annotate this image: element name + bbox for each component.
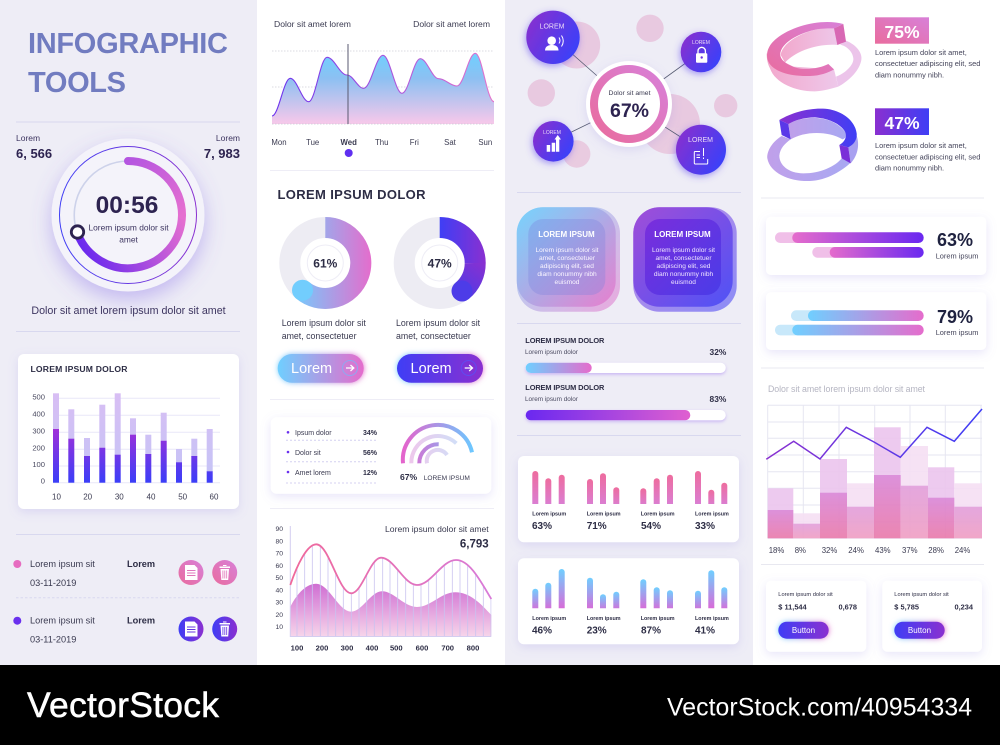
card: pink mini bars: 71% — [587, 521, 607, 532]
progress 32 percent — [525, 336, 727, 373]
panel: column 3 nodes and bars — [505, 0, 753, 665]
footer banner: VectorStock.com/40954334 — [667, 694, 972, 722]
text block 75 percent: consectetuer adipiscing elit, sed — [875, 59, 980, 68]
donut 47 percent — [404, 228, 475, 302]
stat right: Lorem — [216, 133, 240, 143]
donut captions: amet, consectetuer — [282, 331, 357, 341]
list row 2: 03-11-2019 — [30, 634, 76, 644]
panel: column 1 timer and bar chart — [0, 0, 257, 665]
card: blue mini bars: 23% — [587, 626, 607, 636]
3D ring violet — [767, 109, 858, 181]
card: stacked bar chart: 40 — [147, 492, 156, 502]
card: stacked bar chart: 200 — [32, 444, 45, 452]
list row 1 — [13, 559, 237, 588]
chart: double line with spikes: 600 — [416, 644, 428, 652]
badge 47 percent — [875, 108, 929, 135]
card: blue mini bars: Lorem ipsum — [641, 616, 675, 622]
card: blue mini bars: 46% — [532, 626, 552, 636]
chart: double line with spikes: 90 — [275, 526, 283, 533]
card: list and arcs: 67% — [400, 472, 418, 482]
stacked bar and line chart: 37% — [902, 546, 918, 555]
card: list and arcs: Dolor sit — [295, 450, 321, 457]
card: price left: $ 11,544 — [778, 602, 808, 612]
progress 32 percent: 32% — [710, 347, 727, 357]
chart: double line with spikes: 800 — [467, 644, 479, 652]
chart: concentric arcs — [403, 425, 472, 463]
rounded tile: light gradient: Lorem ipsum dolor sit — [535, 247, 599, 254]
chart: double line with spikes: 50 — [275, 575, 283, 582]
weekly area chart — [271, 44, 494, 157]
node: growth bars — [533, 121, 574, 162]
badge 47 percent: 47% — [884, 113, 920, 133]
weekly area chart: Sat — [444, 138, 457, 147]
rounded tile: light gradient — [517, 207, 620, 312]
button: violet Lorem — [397, 354, 483, 383]
card: price right: $ 5,785 — [894, 602, 919, 612]
weekly area chart: Tue — [306, 138, 319, 147]
card: blue mini bars: 87% — [641, 626, 661, 636]
donut 61 percent — [290, 227, 361, 301]
donut captions: amet, consectetuer — [396, 331, 471, 341]
card: bars 79 percent: 79% — [937, 307, 973, 327]
node: document — [676, 125, 726, 175]
card: list and arcs: 12% — [363, 470, 378, 477]
chart: double line with spikes: 200 — [316, 644, 328, 652]
card: stacked bar chart: 0 — [41, 476, 45, 486]
card: bars 79 percent — [766, 292, 986, 350]
rounded tile: light gradient: LOREM IPSUM — [538, 230, 595, 239]
weekly area chart: Mon — [271, 138, 287, 147]
card: stacked bar chart: 30 — [115, 492, 124, 502]
rounded tile: violet gradient: euismod — [671, 279, 696, 286]
footer banner: VectorStock — [27, 685, 219, 725]
progress 83 percent — [525, 383, 727, 420]
title: INFOGRAPHIC — [28, 28, 228, 60]
weekly area chart: Sun — [478, 138, 492, 147]
timer dial: amet — [119, 234, 138, 244]
chart: double line with spikes: 30 — [275, 600, 283, 607]
text block 47 percent: Lorem ipsum dolor sit amet, — [875, 141, 967, 150]
chart: double line with spikes: 700 — [441, 644, 454, 652]
rounded tile: violet gradient: amet, consectetuer — [655, 255, 712, 262]
rounded tile: light gradient: adipiscing elit, sed — [540, 263, 594, 270]
chart: double line with spikes: 300 — [341, 644, 353, 652]
card: stacked bar chart: 50 — [178, 492, 188, 502]
stacked bar and line chart: 18% — [769, 546, 784, 555]
card: blue mini bars: 41% — [695, 626, 715, 636]
card: price right: Button — [908, 626, 931, 635]
rounded tile: light gradient: diam nonummy nibh — [537, 271, 597, 278]
donut 47 percent: 47% — [428, 256, 452, 270]
footer banner — [0, 665, 1000, 745]
badge 75 percent: 75% — [884, 22, 920, 42]
progress 83 percent: LOREM IPSUM DOLOR — [525, 383, 605, 392]
stacked bar and line chart: 43% — [875, 546, 891, 555]
chart: double line with spikes: 6,793 — [460, 538, 489, 550]
icon: trash — [220, 565, 230, 580]
text block 75 percent: diam nonummy nibh. — [875, 70, 944, 80]
list row 1: Lorem ipsum sit — [30, 559, 95, 569]
section heading: LOREM IPSUM DOLOR — [278, 187, 426, 202]
rounded tile: violet gradient: Lorem ipsum dolor sit — [652, 247, 715, 254]
center gauge 67 percent: Dolor sit amet — [609, 90, 651, 97]
card: price left: Lorem ipsum dolor sit — [778, 592, 833, 598]
card: stacked bar chart: 500 — [32, 392, 45, 402]
panel: column 2 charts and donuts — [268, 21, 494, 650]
card: pink mini bars: Lorem ipsum — [641, 512, 675, 518]
area chart header: Dolor sit amet lorem — [274, 19, 351, 29]
card: price left — [766, 581, 866, 652]
node: document: LOREM — [688, 137, 713, 144]
badge 75 percent — [875, 17, 929, 44]
card: stacked bar chart: 10 — [52, 492, 61, 502]
button: violet Lorem: Lorem — [410, 361, 452, 377]
list row 2: Lorem — [127, 616, 155, 626]
rounded tile: violet gradient: LOREM IPSUM — [654, 230, 711, 239]
card: pink mini bars: 33% — [695, 521, 715, 532]
card: blue mini bars: Lorem ipsum — [695, 616, 729, 622]
chart: double line with spikes: 500 — [390, 644, 403, 652]
button: gradient Lorem: Lorem — [291, 361, 332, 377]
card: list and arcs: 56% — [363, 450, 378, 457]
stacked bar and line chart: 24% — [848, 546, 864, 555]
icon: trash — [220, 622, 230, 636]
list row 2 — [13, 616, 237, 644]
card: price right: Lorem ipsum dolor sit — [894, 592, 949, 598]
card: blue mini bars: Lorem ipsum — [532, 616, 566, 622]
card: bars 79 percent: Lorem ipsum — [936, 328, 978, 337]
rounded tile: violet gradient: diam nonummy nibh — [654, 271, 714, 278]
stacked bar and line chart: 24% — [955, 546, 970, 555]
stat right: 7, 983 — [204, 146, 240, 161]
card: stacked bar chart: 100 — [32, 460, 45, 469]
card: pink mini bars: Lorem ipsum — [532, 512, 566, 518]
area chart header: Dolor sit amet lorem — [413, 19, 490, 29]
card: stacked bar chart: LOREM IPSUM DOLOR — [30, 364, 128, 374]
chart: double line with spikes: 20 — [275, 612, 283, 619]
card: pink mini bars: Lorem ipsum — [695, 512, 729, 518]
rounded tile: violet gradient: adipiscing elit, sed — [657, 263, 711, 270]
stat left: Lorem — [16, 133, 40, 143]
donut captions: Lorem ipsum dolor sit — [396, 318, 481, 328]
node: lock: LOREM — [692, 40, 710, 46]
card: list and arcs: LOREM IPSUM — [424, 475, 470, 482]
stat left: 6, 566 — [16, 146, 52, 161]
list row 1: Lorem — [127, 559, 155, 569]
stacked bar and line chart — [766, 405, 982, 555]
rounded tile: light gradient: euismod — [555, 279, 580, 286]
card: list and arcs: Amet lorem — [295, 470, 331, 477]
node: user voice — [526, 11, 580, 64]
chart: double line with spikes: 10 — [275, 624, 283, 631]
card: stacked bar chart: 400 — [32, 410, 45, 418]
card: stacked bar chart — [18, 354, 239, 509]
card: price right — [882, 581, 982, 652]
card: price left: 0,678 — [838, 602, 857, 612]
node: lock — [681, 32, 721, 72]
chart: double line with spikes: 60 — [275, 563, 283, 570]
list row 2: Lorem ipsum sit — [30, 616, 95, 626]
card: pink mini bars: 54% — [641, 521, 661, 532]
panel: column 4 rings and stacked chart — [753, 0, 1000, 665]
weekly area chart: Thu — [375, 138, 388, 147]
chart: double line with spikes: Lorem ipsum dolor sit amet — [385, 524, 489, 534]
donut captions: Lorem ipsum dolor sit — [282, 318, 366, 328]
card: pink mini bars — [518, 456, 739, 542]
card: blue mini bars: Lorem ipsum — [587, 616, 621, 622]
card: pink mini bars: 63% — [532, 521, 552, 532]
stacked bar and line chart: 32% — [822, 546, 837, 555]
timer dial: 00:56 — [96, 192, 158, 219]
card: pink mini bars: Lorem ipsum — [587, 512, 621, 518]
card: stacked bar chart: 300 — [32, 426, 45, 436]
caption: Dolor sit amet lorem ipsum dolor sit amet — [31, 305, 226, 317]
icon: document — [185, 565, 198, 580]
node: user voice: LOREM — [540, 24, 565, 30]
icon: document — [185, 622, 198, 636]
card: list and arcs — [271, 417, 491, 494]
center gauge 67 percent: 67% — [610, 100, 649, 122]
title: TOOLS — [28, 67, 126, 99]
network diagram — [526, 11, 737, 175]
card: list and arcs: 34% — [363, 430, 378, 437]
card: price right: 0,234 — [954, 602, 974, 612]
node: growth bars: LOREM — [543, 130, 561, 136]
chart: double line with spikes: 40 — [275, 588, 283, 594]
progress 83 percent: Lorem ipsum dolor — [525, 396, 579, 403]
card: bars 63 percent: Lorem ipsum — [936, 251, 978, 260]
stacked bar and line chart: 28% — [928, 546, 944, 555]
text block 47 percent: diam nonummy nibh. — [875, 164, 944, 172]
donut 61 percent: 61% — [313, 256, 338, 270]
timer dial — [52, 138, 204, 292]
weekly area chart: Wed — [341, 138, 357, 147]
progress 32 percent: LOREM IPSUM DOLOR — [525, 336, 605, 345]
weekly area chart: Fri — [410, 138, 419, 147]
card: bars 63 percent: 63% — [937, 230, 973, 250]
chart: double line with spikes: 100 — [291, 644, 303, 652]
chart: double line with spikes: 400 — [366, 644, 378, 652]
card: list and arcs: Ipsum dolor — [295, 430, 332, 437]
card: stacked bar chart: 20 — [83, 492, 93, 502]
center gauge 67 percent — [586, 61, 672, 147]
text block 75 percent: Lorem ipsum dolor sit amet, — [875, 48, 967, 57]
card: stacked bar chart: 60 — [210, 492, 219, 502]
stacked bar and line chart: 8% — [795, 546, 806, 555]
3D ring pink — [767, 22, 862, 91]
list row 1: 03-11-2019 — [30, 578, 76, 588]
card: bars 63 percent — [766, 217, 986, 275]
card: blue mini bars — [518, 558, 739, 644]
area chart header — [274, 19, 490, 29]
progress 83 percent: 83% — [710, 394, 727, 404]
rounded tile: violet gradient — [633, 207, 737, 312]
chart: double line with spikes: 80 — [275, 538, 283, 546]
timer dial: Lorem ipsum dolor sit — [88, 222, 169, 232]
button: gradient Lorem — [278, 354, 364, 383]
progress 32 percent: Lorem ipsum dolor — [525, 349, 579, 356]
chart heading: Dolor sit amet lorem ipsum dolor sit amet — [768, 384, 926, 394]
card: price left: Button — [792, 626, 815, 635]
chart: double line with spikes: 70 — [275, 551, 283, 558]
rounded tile: light gradient: amet, consectetuer — [539, 255, 596, 262]
text block 47 percent: consectetuer adipiscing elit, sed — [875, 152, 980, 162]
chart: double line with spikes — [275, 524, 491, 652]
